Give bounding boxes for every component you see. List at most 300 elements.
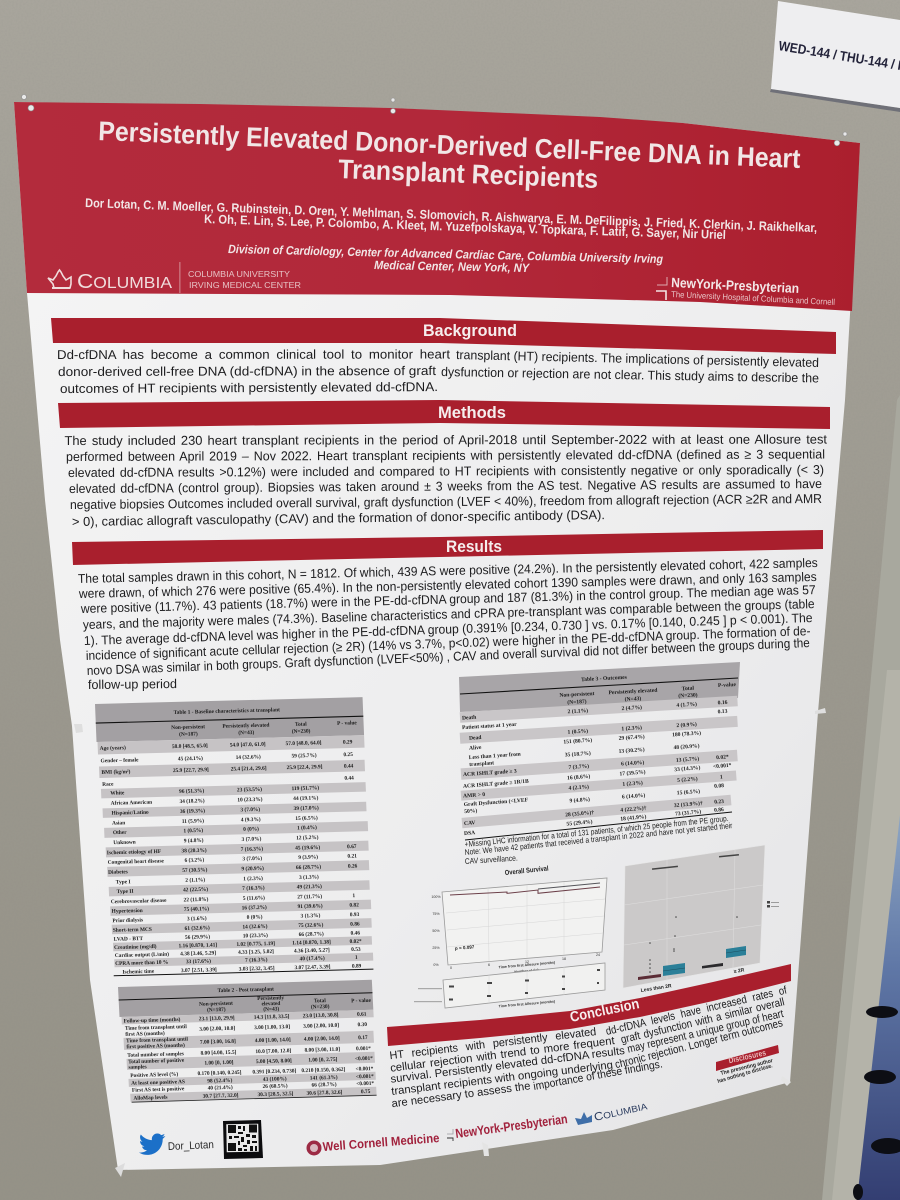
- table 1: baseline characteristics at transplant: 0 (0%): [243, 825, 259, 833]
- text block: Methods: > 0), cardiac allograft vasculopathy (CAV) and the formation of donor-specific antibody (DSA).: [72, 507, 605, 529]
- table 3: outcomes: 2 (4.7%): [621, 704, 642, 712]
- table 1: baseline characteristics at transplant: 1: [352, 893, 356, 899]
- text block: Methods: elevated dd-cfDNA results >0.12%) were included and compared to HT recipients with consistently negative or only sporadically (< 3): [68, 462, 824, 480]
- table 1: baseline characteristics at transplant: 61 (32.6%): [184, 924, 210, 932]
- table 1: baseline characteristics at transplant: 66 (28.7%): [299, 930, 324, 938]
- text block: Background: [57, 347, 819, 396]
- table 3: outcomes: 0.08: [714, 783, 724, 790]
- table 1: baseline characteristics at transplant: 0.25: [343, 752, 353, 758]
- table 1: baseline characteristics at transplant: 59 (25.7%): [291, 752, 317, 760]
- table 3: outcomes: 2 (1.1%): [567, 707, 588, 715]
- table 3: outcomes: AMR > 0: [463, 792, 486, 800]
- chart: overall survival Kaplan-Meier: 75%: [432, 912, 440, 916]
- text block: Results: incidence of significant acute cellular rejection (≥ 2R) (14% vs 3.7%, p<0.02) were higher in the PE-dd-cfDNA group. The formation of de-: [86, 623, 811, 663]
- table 1: baseline characteristics at transplant: Prior dialysis: [112, 917, 143, 924]
- table 3: outcomes: <0.001*: [713, 763, 732, 770]
- table 1: baseline characteristics at transplant: 0.89: [352, 963, 362, 970]
- table 2: post transplant: Table 2 - Post transplant: [217, 987, 274, 994]
- table 1: baseline characteristics at transplant: Congenital heart disease: [108, 858, 165, 866]
- table 2: post transplant: 40 (21.4%): [207, 1084, 233, 1092]
- table 3: outcomes: 9 (4.8%): [569, 796, 590, 804]
- chart: overall survival Kaplan-Meier: p = 0.097: [455, 944, 475, 951]
- table 2: post transplant: Total: [314, 998, 326, 1004]
- chart: overall survival Kaplan-Meier: 100%: [431, 895, 441, 899]
- section bar: Background: Background: [423, 322, 517, 340]
- table 1: baseline characteristics at transplant: 5 (11.6%): [243, 894, 265, 902]
- box plot legend: [767, 901, 779, 908]
- table 3: outcomes: 13 (5.7%): [676, 755, 700, 764]
- section bar: Methods: Methods: [438, 404, 506, 422]
- table 3: outcomes: 15 (6.5%): [677, 788, 700, 797]
- table 1: baseline characteristics at transplant: [95, 697, 374, 976]
- table 2: post transplant: (N=43): [263, 1005, 280, 1013]
- table 2: post transplant: 8.00 [3.00, 11.0]: [304, 1047, 340, 1054]
- table 2: post transplant: 26 (60.5%): [262, 1082, 288, 1090]
- text block: Results: novo DSA was similar in both groups. Graft dysfunction (LVEF<50%) , CAV and overall survival did not differ between the groups during the: [87, 635, 810, 678]
- table 1: baseline characteristics at transplant: 14 (32.6%): [242, 923, 268, 930]
- table 1: baseline characteristics at transplant: 57.0 [48.0, 64.0]: [286, 740, 322, 747]
- text block: Conclusion: graft dysfunction with a similar overall: [620, 996, 786, 1046]
- table 3: outcomes: 180 (78.3%): [672, 730, 701, 738]
- table 2: post transplant: [118, 980, 378, 1103]
- table 1: baseline characteristics at transplant: Ischemic etiology of HF: [107, 849, 162, 856]
- table 2: post transplant: 43 (100%): [263, 1075, 287, 1083]
- text block: Conclusion: survival. Persistently elevated dd-cfDNA results: [390, 1045, 626, 1086]
- chart: overall survival Kaplan-Meier: 0: [450, 966, 452, 970]
- authors: K. Oh, E. Lin, S. Lee, P. Colombo, A. Kleet, M. Yuzefpolskaya, V. Topkara, F. Latif, G. Sayer, Nir Uriel: [204, 212, 726, 242]
- section bar: Conclusion: Conclusion: [569, 996, 641, 1026]
- table 1: baseline characteristics at transplant: Short-term MCS: [113, 927, 152, 934]
- table 1: baseline characteristics at transplant: 66 (28.7%): [296, 863, 321, 871]
- table 1: baseline characteristics at transplant: Cerebrovascular disease: [111, 898, 167, 905]
- table 1: baseline characteristics at transplant: 57 (30.5%): [182, 866, 208, 874]
- title: Transplant Recipients: [338, 154, 599, 194]
- text block: Results: The total samples drawn in this cohort, N = 1812. Of which, 439 AS were positive (24.2%). In the persistently elevated cohort, 422 samples: [78, 555, 818, 586]
- table 1: baseline characteristics at transplant: 3 (7.0%): [241, 835, 262, 843]
- table 1: baseline characteristics at transplant: 75 (32.6%): [298, 921, 324, 929]
- table 1: baseline characteristics at transplant: 54.0 [47.0, 61.0]: [230, 742, 266, 749]
- table 1: baseline characteristics at transplant: Diabetes: [108, 869, 128, 876]
- section bar: Conclusion: [387, 964, 791, 1046]
- table 1: baseline characteristics at transplant: 25.9 [22.4, 29.9]: [286, 764, 323, 771]
- table 2: post transplant: Time from transplant until: [126, 1037, 189, 1044]
- table 3: outcomes: 0.86: [714, 807, 724, 814]
- table 1: baseline characteristics at transplant: 0.21: [347, 853, 357, 860]
- table 2: post transplant: 3.00 [2.00, 10.0]: [303, 1023, 339, 1030]
- table 1: baseline characteristics at transplant: Ischemic time: [122, 969, 155, 976]
- chart: overall survival Kaplan-Meier: 50%: [432, 929, 440, 933]
- table 3: outcomes: Dead: [469, 735, 483, 742]
- table 3: outcomes: 4 (1.7%): [676, 701, 697, 709]
- table 2: post transplant: first AS (months): [125, 1030, 165, 1038]
- text block: Methods: The study included 230 heart transplant recipients in the period of April-2018 until September-2022 with at least one Allosure test: [64, 432, 827, 448]
- logo: NewYork-Presbyterian: The University Hospital of Columbia and Cornell: [671, 289, 835, 307]
- table 1: baseline characteristics at transplant: 0 (0%): [247, 913, 263, 921]
- disclosures box: Disclosures: [728, 1048, 767, 1065]
- table 2: post transplant: 5.00 [4.50, 8.00]: [256, 1058, 292, 1065]
- table 1: baseline characteristics at transplant: 49 (21.3%): [297, 883, 322, 891]
- text block: Conclusion: may represent a unique group of heart: [626, 1008, 785, 1056]
- table 1: baseline characteristics at transplant: 14 (32.6%): [236, 753, 261, 761]
- table 3: outcomes: Patient status at 1 year: [462, 722, 517, 731]
- logo: Columbia footer: [575, 1100, 648, 1125]
- table 3: outcomes: 1 (0.5%): [567, 727, 588, 736]
- table 1: baseline characteristics at transplant: 0.29: [343, 739, 353, 746]
- chart: overall survival Kaplan-Meier: 24: [596, 953, 600, 957]
- table 3: outcomes: 50%): [464, 807, 478, 815]
- logo: NewYork-Presbyterian: NewYork-Presbyterian: [671, 275, 799, 296]
- table 1: baseline characteristics at transplant: Unknown: [113, 840, 136, 846]
- table 1: baseline characteristics at transplant: 4.38 [3.46, 5.29]: [180, 950, 216, 957]
- table 2: post transplant: At least one positive AS: [131, 1079, 185, 1087]
- chart: overall survival Kaplan-Meier: 6: [488, 963, 490, 967]
- table 3: outcomes: Table 3 - Outcomes: [581, 675, 628, 683]
- text block: Background: outcomes of HT recipients with persistently elevated dd-cfDNA.: [60, 379, 438, 396]
- logo: Columbia University Irving Medical Center: COLUMBIA UNIVERSITY: [188, 270, 291, 279]
- table 1: baseline characteristics at transplant: 75 (40.1%): [184, 905, 209, 913]
- table 1: baseline characteristics at transplant: 38 (20.3%): [181, 847, 207, 854]
- table 1: baseline characteristics at transplant: 22 (11.8%): [183, 896, 209, 903]
- text block: Conclusion: HT recipients with persistently elevated: [389, 1026, 597, 1062]
- text block: Results: [78, 555, 818, 692]
- table 1: baseline characteristics at transplant: 1 (0.5%): [183, 827, 203, 834]
- table 1: baseline characteristics at transplant: 16 (37.2%): [242, 904, 267, 911]
- table 1: baseline characteristics at transplant: 119 (51.7%): [291, 784, 319, 792]
- table 1: baseline characteristics at transplant: 6 (3.2%): [184, 856, 205, 864]
- text block: Methods: elevated dd-cfDNA (control group). Biopsies was taken around ± 3 weeks from the AS test. Negative AS results are assumed to have: [69, 476, 822, 496]
- table 1: baseline characteristics at transplant: Hypertension: [112, 908, 143, 915]
- table 1: baseline characteristics at transplant: Race: [102, 782, 114, 788]
- box plot boxes: [638, 946, 746, 980]
- table 2: post transplant: 4.00 [1.00, 14.0]: [255, 1037, 291, 1044]
- table 1: baseline characteristics at transplant: 34 (18.2%): [179, 797, 205, 805]
- table 1: baseline characteristics at transplant: 0.67: [347, 844, 357, 850]
- table 1: baseline characteristics at transplant: 3 (7.0%): [240, 806, 260, 813]
- disclosures box: [716, 1045, 779, 1085]
- table 2: post transplant: 14.3 [11.8, 33.5]: [254, 1014, 290, 1021]
- table 1: baseline characteristics at transplant: 42 (22.5%): [183, 886, 208, 893]
- table 2: post transplant: <0.001*: [356, 1081, 375, 1087]
- chart: overall survival Kaplan-Meier: [431, 865, 607, 974]
- table 3: outcomes: 6 (14.0%): [622, 792, 646, 801]
- table 3: outcomes: Persistently elevated: [608, 688, 658, 696]
- text block: Conclusion: transplant recipients with ongoing underlying: [391, 1059, 614, 1098]
- table 3: outcomes: Total: [682, 686, 695, 692]
- table 3: outcomes: Non-persistent: [559, 691, 595, 699]
- metal frame and carpet at right edge: [822, 395, 900, 1200]
- table 1: baseline characteristics at transplant: 7 (16.3%): [242, 884, 265, 892]
- table 2: post transplant: Persistently: [257, 995, 285, 1002]
- table 2: post transplant: AlloMap levels: [133, 1095, 168, 1102]
- table 3: outcomes: ACR ISHLT grade ≥ 1R/1B: [463, 779, 529, 790]
- text block: Results: follow-up period: [88, 676, 177, 692]
- table 1: baseline characteristics at transplant: 44 (19.1%): [293, 794, 319, 802]
- text block: Background: transplant (HT) recipients. The implications of persistently elevated: [456, 347, 819, 370]
- table 2: post transplant: Time from transplant until: [125, 1024, 187, 1032]
- table 1: baseline characteristics at transplant: 1: [355, 955, 358, 961]
- table 3: outcomes: 29 (67.4%): [618, 733, 645, 742]
- table 2: post transplant: (N=187): [207, 1006, 226, 1014]
- table 1: baseline characteristics at transplant: 3 (1.3%): [300, 912, 321, 919]
- table 1: baseline characteristics at transplant: 45 (24.1%): [178, 755, 203, 762]
- text block: Background: dysfunction or rejection are not clear. This study aims to describe the: [441, 364, 819, 385]
- text block: Conclusion: dd-cfDNA levels have increased rates of: [605, 984, 789, 1038]
- table 1: baseline characteristics at transplant: 0.93: [350, 912, 360, 918]
- text block: Methods: performed between April 2019 – Nov 2022. Heart transplant recipients with persistently elevated dd-cfDNA (defined as ≥ 3 sequential: [66, 446, 825, 464]
- chart: overall survival Kaplan-Meier: 0%: [433, 963, 439, 967]
- table 1: baseline characteristics at transplant: 15 (6.5%): [295, 814, 318, 822]
- table 1: baseline characteristics at transplant: 33 (17.6%): [186, 958, 211, 965]
- text block: Conclusion: cellular rejection with trend to more frequent: [390, 1035, 616, 1075]
- table 1: baseline characteristics at transplant: (N=230): [292, 727, 311, 735]
- table 1: baseline characteristics at transplant: Type II: [117, 889, 134, 895]
- table 3: outcomes: 28 (35.0%)†: [565, 809, 595, 818]
- table 3: outcomes: 33 (14.3%): [674, 764, 701, 773]
- table 1: baseline characteristics at transplant: Gender – female: [101, 757, 139, 764]
- table 1: baseline characteristics at transplant: 25.9 [22.7, 29.9]: [173, 767, 209, 774]
- table 1: baseline characteristics at transplant: 39 (17.0%): [293, 804, 319, 812]
- text block: Results: 1). The average dd-cfDNA level was higher in the PE-dd-cfDNA group (0.391% [0.234, 0.730 ] vs. 0.17% [0.140, 0.245 ] p < 0.001). The: [84, 610, 813, 648]
- text block: Results: were positive (11.7%). 43 patients (18.7%) were in the PE-dd-cfDNA group and 187 (81.3%) in the control group. The median age was 57: [80, 582, 816, 616]
- table 3: outcomes: 18 (41.9%): [620, 813, 647, 823]
- table 1: baseline characteristics at transplant: 3 (1.3%): [299, 873, 319, 881]
- chart: overall survival Kaplan-Meier: 12: [525, 960, 529, 964]
- table 1: baseline characteristics at transplant: 7 (16.3%): [245, 956, 268, 964]
- table 3: outcomes: P-value: [718, 682, 737, 689]
- table 3: outcomes: 0.16: [718, 700, 728, 706]
- table 1: baseline characteristics at transplant: 3.03 [2.32, 3.45]: [239, 966, 275, 973]
- table 1: baseline characteristics at transplant: African American: [111, 800, 152, 807]
- table 1: baseline characteristics at transplant: 45 (19.6%): [295, 844, 321, 852]
- table 1: baseline characteristics at transplant: 7 (16.3%): [241, 845, 263, 853]
- table 2: post transplant: elevated: [261, 1001, 281, 1007]
- table 2: post transplant: <0.001*: [355, 1056, 373, 1062]
- table 3: outcomes: 151 (80.7%): [563, 737, 593, 746]
- table 1: baseline characteristics at transplant: P - value: [337, 720, 357, 727]
- table 1: baseline characteristics at transplant: BMI (kg/m²): [101, 768, 131, 776]
- table 3: outcomes: (N=43): [624, 695, 642, 703]
- table 2: post transplant: 3.00 [2.00, 10.0]: [199, 1026, 236, 1033]
- table 2: post transplant: Total number of samples: [127, 1051, 184, 1059]
- table 1: baseline characteristics at transplant: 2 (1.1%): [185, 876, 205, 884]
- chart: overall survival Kaplan-Meier: 25%: [432, 946, 440, 950]
- table 1: baseline characteristics at transplant: 9 (3.9%): [298, 853, 318, 861]
- table 2: post transplant: 30.3 [28.5, 32.5]: [257, 1091, 294, 1098]
- table 2: post transplant: 0.210 [0.150, 0.362]: [301, 1067, 346, 1074]
- table 1: baseline characteristics at transplant: Creatinine (mg/dl): [114, 943, 157, 951]
- icon: twitter bird with handle: Dor_Lotan: [168, 1139, 214, 1153]
- logo: Columbia University Irving Medical Center: IRVING MEDICAL CENTER: [189, 281, 301, 290]
- table 1: baseline characteristics at transplant: 10 (23.3%): [237, 796, 263, 803]
- table 2: post transplant: 10.0 [7.00, 12.0]: [255, 1048, 292, 1055]
- table 1: baseline characteristics at transplant: 3.07 [2.47, 3.39]: [294, 964, 331, 971]
- survival curves: [450, 883, 600, 895]
- table 1: baseline characteristics at transplant: 0.26: [348, 863, 358, 870]
- table 2: post transplant: 8.00 [4.00, 15.5]: [200, 1050, 237, 1057]
- text block: Methods: [64, 432, 827, 529]
- text block: Results: were drawn, of which 276 were positive (65.4%). In the non-persistently elevated cohort 1390 samples were drawn, and only 163 samples: [78, 569, 817, 601]
- table 3 footnote: +Missing LHC information for a total of 131 patients, of which 25 people from the PE group.: [464, 814, 729, 849]
- table 3: outcomes: ACR ISHLT grade ≥ 3: [463, 769, 517, 778]
- table 2: post transplant: 30.7 [27.7, 32.0]: [203, 1093, 239, 1100]
- table 1: baseline characteristics at transplant: 3 (1.6%): [187, 915, 207, 922]
- text block: Results: years, and the majority were males (74.3%). Baseline characteristics and cPRA pre-transplant was comparable between the groups (table: [83, 596, 815, 632]
- table 2: post transplant: 1.00 [0, 2.75]: [308, 1057, 338, 1064]
- text block: Conclusion: [389, 984, 789, 1110]
- table 1: baseline characteristics at transplant: CPRA more than 10 %: [115, 960, 168, 967]
- table 1: baseline characteristics at transplant: Other: [113, 830, 127, 836]
- chart: number at risk table: [414, 963, 605, 1008]
- logo: Weill Cornell Medicine: Well Cornell Medicine: [322, 1131, 440, 1154]
- session number sign: [770, 1, 900, 112]
- table 3: outcomes: 1: [720, 774, 723, 781]
- table 3: outcomes: Less than 1 year from: [469, 752, 521, 761]
- table 3: outcomes: Alive: [469, 745, 482, 752]
- table 1: baseline characteristics at transplant: 27 (11.7%): [297, 893, 322, 901]
- table 2: post transplant: 4.00 [2.00, 14.0]: [304, 1036, 340, 1043]
- table 1: baseline characteristics at transplant: 10 (23.3%): [243, 932, 268, 939]
- table 3: outcomes: 1 (2.3%): [622, 779, 643, 788]
- table 1: baseline characteristics at transplant: Non-persistent: [171, 724, 205, 731]
- table 1: baseline characteristics at transplant: 0.44: [344, 763, 354, 770]
- table 1: baseline characteristics at transplant: 0.44: [344, 775, 354, 782]
- table 3: outcomes: 55 (29.4%): [566, 818, 593, 828]
- authors: Dor Lotan, C. M. Moeller, G. Rubinstein, D. Oren, Y. Mehlman, S. Slomovich, R. Aishwarya, E. M. DeFilippis, J. Fried, K. Clerkin, J. Raikhelkar,: [85, 196, 817, 235]
- table 1: baseline characteristics at transplant: 4 (9.3%): [241, 816, 261, 823]
- table 3: outcomes: [459, 662, 740, 840]
- table 2: post transplant: Positive AS level (%): [130, 1071, 179, 1079]
- table 1: baseline characteristics at transplant: 0.53: [351, 947, 361, 953]
- table 3: outcomes: 0.23: [714, 799, 724, 806]
- table 3: outcomes: Graft Dysfunction (<LVEF: [463, 796, 529, 808]
- table 3: outcomes: 32 (13.9%)†: [674, 800, 703, 809]
- table 2: post transplant: 3.00 [1.00, 13.0]: [254, 1024, 290, 1031]
- disclosures box: has nothing to disclose.: [717, 1063, 774, 1085]
- table 1: baseline characteristics at transplant: Persistently elevated: [222, 723, 270, 730]
- table 2: post transplant: 0.170 [0.140, 0.245]: [197, 1070, 242, 1077]
- table 2: post transplant: 1.00 [0, 1.00]: [204, 1060, 234, 1067]
- table 1: baseline characteristics at transplant: Asian: [112, 820, 125, 827]
- table 1: baseline characteristics at transplant: 1.14 [0.870, 1.38]: [292, 939, 331, 947]
- table 1: baseline characteristics at transplant: 40 (17.4%): [299, 955, 325, 962]
- table 1: baseline characteristics at transplant: 9 (4.8%): [184, 837, 204, 844]
- table 2: post transplant: First AS test is positive: [132, 1086, 185, 1094]
- icon: twitter bird with handle: [139, 1133, 214, 1155]
- table 1: baseline characteristics at transplant: 1.16 [0.870, 1.41]: [178, 942, 217, 949]
- table 1: baseline characteristics at transplant: Hispanic/Latino: [112, 810, 149, 817]
- table 2: post transplant: (N=230): [311, 1003, 330, 1011]
- table 1: baseline characteristics at transplant: Table 1 - Baseline characteristics at transplant: [174, 707, 280, 716]
- table 2: post transplant: 0.61: [357, 1012, 367, 1018]
- table 3: outcomes: (N=230): [678, 691, 698, 700]
- table 1: baseline characteristics at transplant: LVAD - BTT: [114, 936, 144, 943]
- table 3: outcomes: 17 (39.5%): [619, 768, 646, 778]
- text block: Conclusion: importance of these findings.: [532, 1058, 664, 1093]
- disclosures box: The presenting author: [720, 1058, 774, 1077]
- icon: QR code: [223, 1120, 263, 1159]
- text block: Conclusion: chronic rejection. Longer term outcomes: [614, 1017, 784, 1071]
- table 3: outcomes: 48 (20.9%): [673, 742, 700, 751]
- chart: overall survival Kaplan-Meier: Overall Survival: [504, 865, 549, 877]
- table 2: post transplant: samples: [128, 1064, 147, 1071]
- table 2: post transplant: 141 (61.3%): [310, 1074, 338, 1082]
- header banner: [14, 102, 860, 311]
- table 1: baseline characteristics at transplant: 56 (29.9%): [185, 933, 210, 941]
- table 1: baseline characteristics at transplant: 11 (5.9%): [182, 817, 204, 825]
- table 3: outcomes: 13 (30.2%): [618, 746, 645, 755]
- chart: number at risk table: Time from first Allosure (months): [498, 999, 556, 1008]
- table 3 footnote: [464, 814, 733, 866]
- table 1: baseline characteristics at transplant: 0.82: [349, 902, 359, 909]
- table 2: post transplant: Follow-up time (months): [123, 1016, 181, 1025]
- table 3: outcomes: 5 (2.2%): [677, 775, 698, 784]
- chart: box plot: Less than 2R: [640, 983, 672, 994]
- affiliation: Medical Center, New York, NY: [374, 258, 530, 275]
- table 3: outcomes: transplant: [469, 760, 494, 768]
- section bar: Methods: [58, 400, 830, 429]
- table 3 footnote: Note: We have 42 patients that received a transplant in 2022 and have not yet started their: [464, 821, 733, 857]
- table 1: baseline characteristics at transplant: 12 (5.2%): [296, 834, 319, 842]
- table 2: post transplant: 0.391 [0.234, 0.730]: [252, 1068, 297, 1076]
- table 2: post transplant: first positive AS (months): [126, 1042, 185, 1050]
- table 3: outcomes: 16 (8.6%): [567, 773, 591, 782]
- table 2: post transplant: 0.30: [357, 1022, 367, 1028]
- table 3: outcomes: CAV: [464, 820, 476, 827]
- table 2: post transplant: 7.00 [3.00, 16.8]: [200, 1039, 236, 1046]
- table 1: baseline characteristics at transplant: Type I: [116, 879, 131, 886]
- table 1: baseline characteristics at transplant: 25.4 [21.4, 29.6]: [231, 766, 267, 773]
- logo: Columbia footer: COLUMBIA: [593, 1100, 648, 1124]
- table 2: post transplant: <0.001*: [355, 1066, 374, 1073]
- table 1: baseline characteristics at transplant: 4.33 [3.25, 5.02]: [238, 949, 274, 956]
- table 1: baseline characteristics at transplant: 4.36 [3.40, 5.27]: [294, 948, 330, 955]
- table 2: post transplant: 30.6 [27.8, 32.6]: [306, 1090, 343, 1097]
- table 2: post transplant: 23.1 [13.0, 29.9]: [199, 1015, 235, 1022]
- chart: overall survival Kaplan-Meier: 18: [562, 957, 566, 961]
- table 2: post transplant: 66 (28.7%): [311, 1081, 337, 1089]
- table 1: baseline characteristics at transplant: 0.86: [350, 921, 360, 928]
- table 3: outcomes: (N=187): [567, 698, 587, 706]
- table 1: baseline characteristics at transplant: 23 (53.5%): [237, 786, 262, 793]
- section bar: Background: [51, 318, 836, 354]
- table 2: post transplant: Non-persistent: [199, 1001, 233, 1008]
- table 1: baseline characteristics at transplant: White: [110, 790, 125, 797]
- table 2: post transplant: P - value: [351, 998, 372, 1004]
- text block: Background: donor-derived cell-free DNA (dd-cfDNA) in the absence of graft: [58, 363, 436, 379]
- table 2: post transplant: 98 (52.4%): [207, 1077, 233, 1085]
- table 3: outcomes: 6 (14.0%): [621, 759, 645, 768]
- table 3: outcomes: DSA: [464, 830, 476, 837]
- table 2: post transplant: <0.001*: [356, 1074, 374, 1080]
- table 3: outcomes: 0.02*: [716, 754, 729, 761]
- table 1: baseline characteristics at transplant: (N=43): [238, 729, 255, 736]
- table 1: baseline characteristics at transplant: 91 (39.6%): [297, 902, 323, 910]
- table 2: post transplant: Total number of positive: [128, 1058, 185, 1065]
- table 1: baseline characteristics at transplant: 9 (20.9%): [241, 865, 264, 872]
- table 1: baseline characteristics at transplant: 58.0 [48.5, 65.0]: [172, 743, 208, 750]
- table 2: post transplant: 0.001*: [356, 1046, 371, 1052]
- logo: NewYork-Presbyterian: [656, 275, 835, 307]
- chart: overall survival Kaplan-Meier: Number at risk: [514, 968, 540, 974]
- table 3 footnote: CAV surveillance.: [465, 854, 518, 866]
- title: Persistently Elevated Donor-Derived Cell-Free DNA in Heart: [98, 116, 801, 174]
- table 1: baseline characteristics at transplant: 0.02*: [349, 939, 362, 945]
- table 1: baseline characteristics at transplant: Total: [295, 722, 307, 728]
- text block: Methods: negative biopsies Outcomes included overall survival, graft dysfunction (LVEF < 40%), freedom from allograft rejection (ACR ≥2R and AMR: [70, 491, 822, 512]
- table 3: outcomes: Death: [462, 715, 477, 722]
- table 2: post transplant: 23.0 [13.0, 30.8]: [303, 1012, 339, 1019]
- chart: box plot: ≥ 2R: [733, 967, 745, 975]
